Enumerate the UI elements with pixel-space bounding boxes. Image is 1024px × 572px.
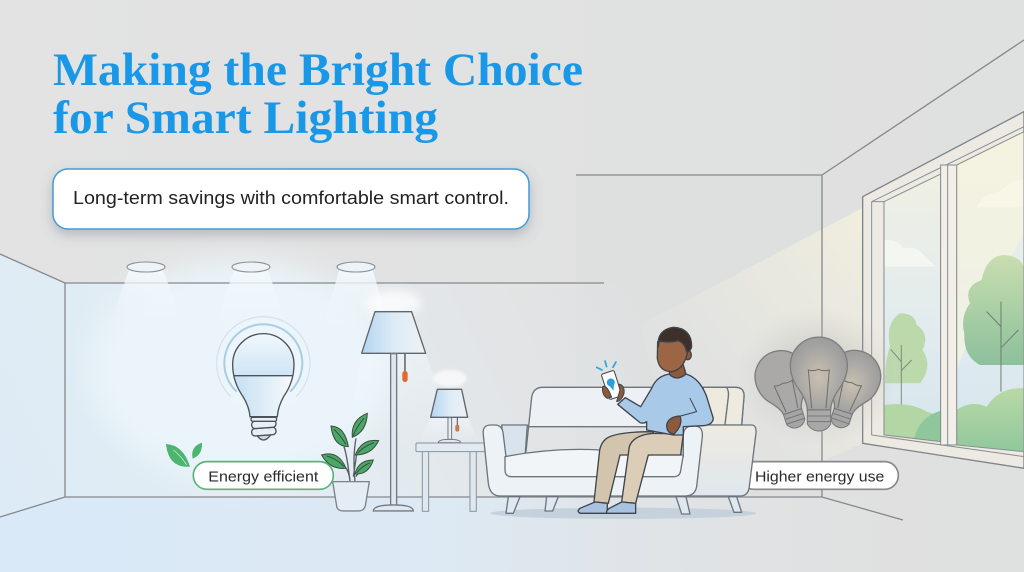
left window pane: [884, 240, 940, 441]
right window pane: [957, 132, 1024, 451]
phone: [601, 370, 622, 400]
window with trees: [735, 112, 1024, 489]
icon: green leaves: [166, 443, 202, 467]
subtitle callout: [53, 169, 529, 229]
potted plant: [322, 413, 379, 511]
shoe left: [578, 502, 607, 513]
left scene: bulb, lamps, plant: [166, 290, 488, 511]
man: [578, 327, 713, 513]
label: higher energy use: [740, 462, 898, 489]
sunlight beam from window: [640, 203, 872, 520]
neck: [669, 365, 686, 378]
torso and arm: [618, 374, 713, 435]
title: Making the Bright Choice: [53, 44, 583, 96]
label: energy efficient: Energy efficient: [208, 469, 319, 486]
hair: [658, 327, 692, 352]
label: higher energy use: Higher energy use: [755, 469, 884, 486]
window frame: [863, 112, 1024, 468]
floor shadow: [490, 508, 757, 519]
ceiling lights with light cones: [108, 262, 392, 340]
title: [53, 44, 583, 144]
left bulb: [748, 344, 823, 436]
sleeve crease: [681, 398, 697, 416]
right bulb: [813, 344, 887, 435]
person on sofa: [483, 327, 757, 519]
right leg: [622, 433, 683, 503]
old incandescent bulbs: [735, 307, 902, 447]
ear: [684, 350, 691, 360]
hand on knee: [667, 416, 681, 434]
left leg: [594, 432, 653, 503]
hand holding phone: [603, 384, 624, 402]
center bulb: [790, 337, 847, 431]
subtitle callout: Long-term savings with comfortable smart control.: [73, 188, 509, 208]
head: [657, 340, 687, 372]
label: energy efficient: [193, 462, 333, 489]
floor lamp: [343, 290, 460, 511]
sofa: [483, 387, 756, 514]
window panes outline and mullion: [872, 127, 1024, 457]
table lamp on side table: [416, 370, 488, 511]
phone signal rays: [597, 361, 616, 370]
icon: efficient LED bulb: [197, 298, 330, 440]
shoe right: [607, 502, 636, 513]
title: for Smart Lighting: [53, 92, 438, 144]
